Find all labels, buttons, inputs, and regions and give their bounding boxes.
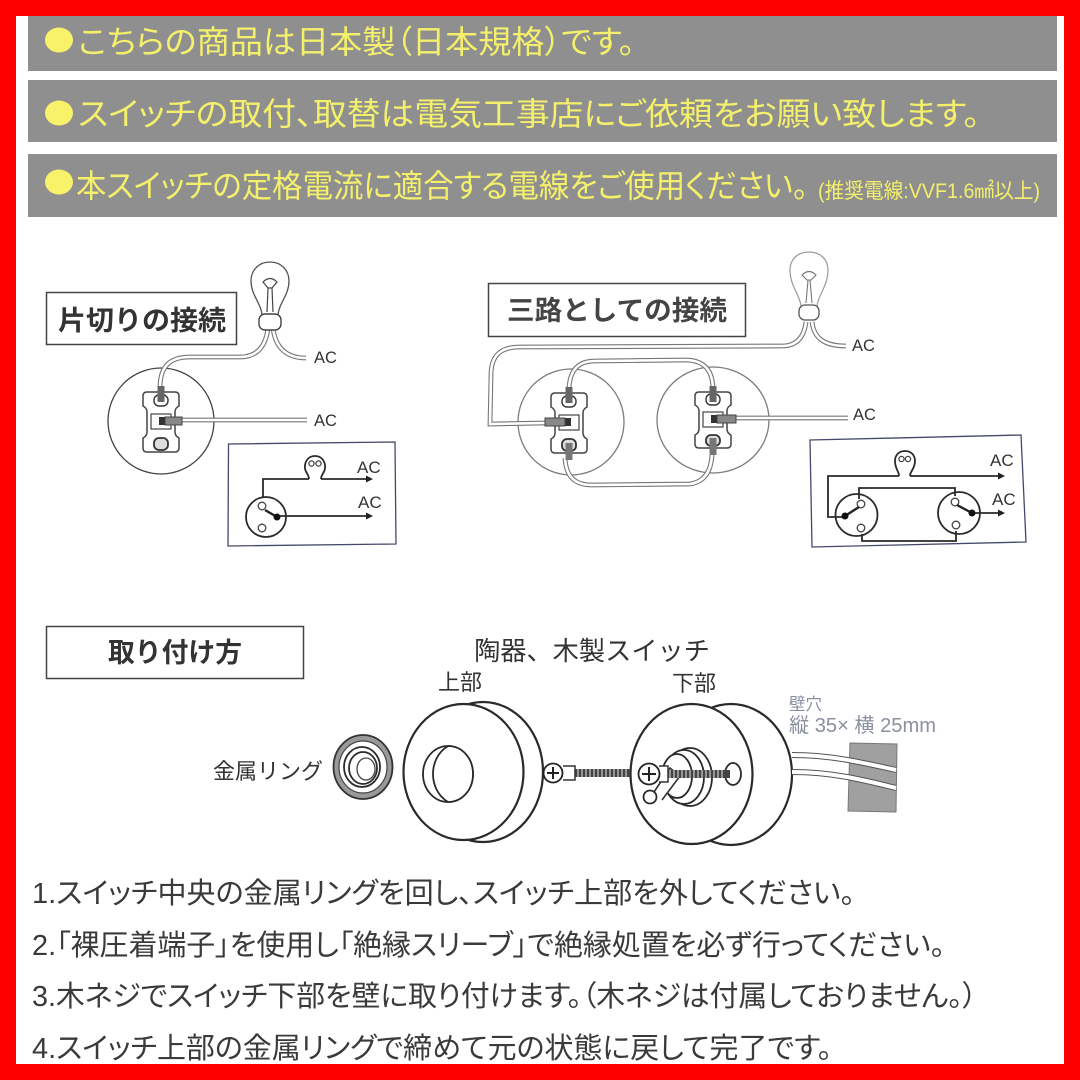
wires (160, 328, 307, 420)
label: wall hole size (789, 695, 936, 737)
icon: metal ring (334, 735, 392, 799)
circuit schematic: single-pole: AC (357, 458, 381, 477)
switch plate (143, 386, 182, 452)
notice bar 1: こちらの商品は日本製（日本規格）です。 (78, 24, 635, 60)
left switch plate (545, 387, 587, 460)
right switch plate (695, 386, 736, 455)
notice bar 2: スイッチの取付、取替は電気工事店にご依頼をお願い致します。 (78, 96, 980, 132)
AC labels: AC (314, 349, 337, 367)
mounting circle (108, 368, 214, 474)
heading: three-way connection: 三路としての接続 (507, 296, 727, 326)
AC labels: AC (853, 406, 876, 424)
heading: three-way connection (488, 284, 746, 336)
diagram: three-way wiring (490, 252, 876, 485)
notice bar 3: 本スイッチの定格電流に適合する電線をご使用ください。 (76, 168, 808, 204)
installation steps (32, 877, 977, 1065)
diagram: single-pole wiring (108, 262, 337, 474)
illustration: wall hole with wires (792, 743, 897, 812)
notice bar 1 (28, 16, 1057, 71)
illustration: switch bottom part (630, 704, 792, 845)
notice bar 2 (28, 80, 1057, 142)
AC labels: AC (314, 412, 337, 430)
heading: single-pole connection: 片切りの接続 (58, 306, 226, 336)
circuit schematic: single-pole (228, 442, 396, 546)
bulb (790, 252, 828, 320)
circuit schematic: three-way: AC (992, 490, 1016, 509)
notice bar 3 (28, 154, 1057, 217)
step 3: 3.木ネジでスイッチ下部を壁に取り付けます。（木ネジは付属しておりません。） (32, 980, 977, 1013)
mounting circles (518, 367, 769, 475)
bulb (251, 262, 289, 330)
circuit schematic: three-way (810, 435, 1026, 547)
circuit schematic: single-pole: AC (358, 493, 382, 512)
heading: how to install: 取り付け方 (108, 638, 242, 668)
heading: single-pole connection (46, 292, 236, 344)
step 4: 4.スイッチ上部の金属リングで締めて元の状態に戻して完了です。 (32, 1032, 832, 1065)
label: ceramic and wood switch: 陶器、木製スイッチ (474, 636, 710, 666)
heading: how to install (46, 626, 304, 678)
label: top part: 上部 (438, 670, 482, 695)
step 2: 2.「裸圧着端子」を使用し「絶縁スリーブ」で絶縁処置を必ず行ってください。 (32, 929, 945, 962)
step 1: 1.スイッチ中央の金属リングを回し、スイッチ上部を外してください。 (32, 877, 855, 910)
AC labels (852, 337, 876, 424)
AC labels (314, 349, 337, 430)
notice bar 3: (推奨電線:VVF1.6㎟以上) (818, 179, 1040, 203)
illustration: long wood screw (544, 764, 636, 782)
label: wall hole size: 縦 35× 横 25mm (789, 714, 936, 737)
label: bottom part: 下部 (672, 671, 716, 696)
wires (490, 322, 848, 485)
AC labels: AC (852, 337, 875, 355)
illustration: switch top part (404, 702, 543, 842)
label: metal ring: 金属リング (213, 759, 323, 784)
label: wall hole size: 壁穴 (789, 695, 822, 714)
circuit schematic: three-way: AC (990, 451, 1014, 470)
